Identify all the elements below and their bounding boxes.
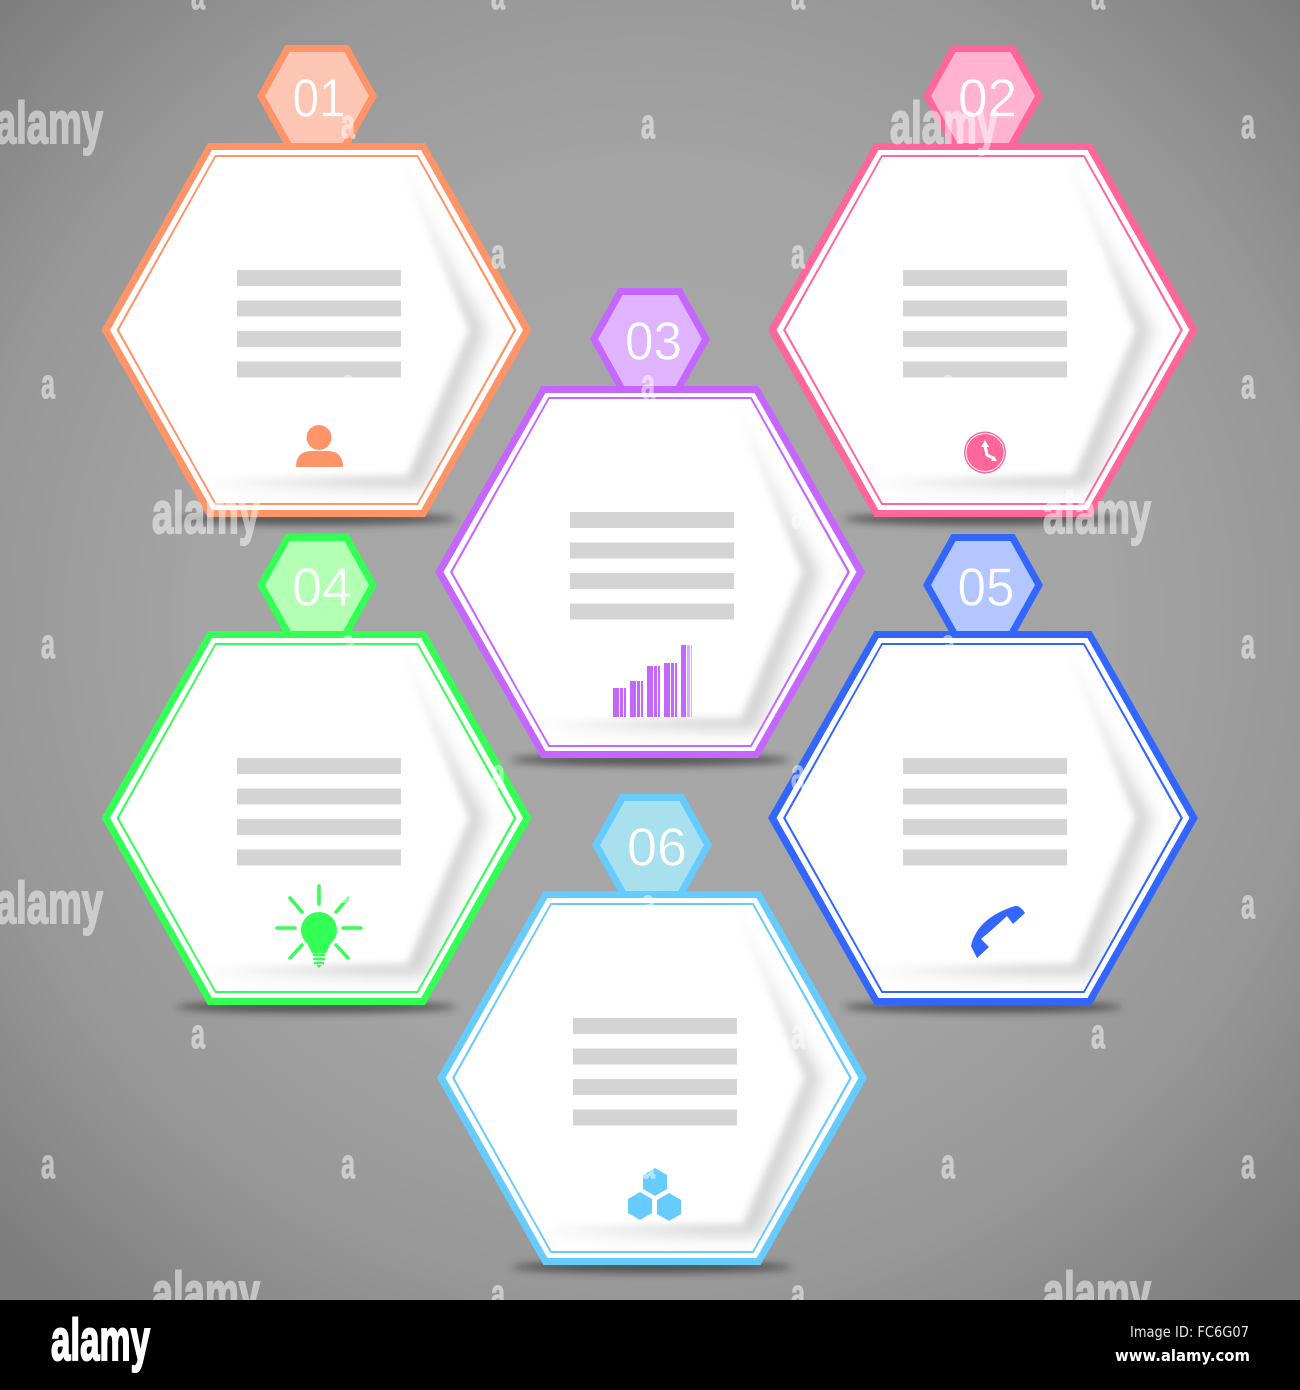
number badge 06 xyxy=(592,794,712,896)
hexagon card 04 xyxy=(16,518,532,1013)
icon: light bulb xyxy=(277,886,361,968)
number badge 02: 02 xyxy=(958,68,1017,128)
watermarks: a xyxy=(341,620,355,667)
icon: clock xyxy=(964,432,1006,474)
watermarks: a xyxy=(341,1140,355,1187)
watermarks: a xyxy=(1241,620,1255,667)
hexagon card 01 xyxy=(16,30,532,525)
watermarks: a xyxy=(41,620,55,667)
panel 05: blue hexagon xyxy=(683,518,1198,1013)
icon: person xyxy=(296,425,343,467)
watermarks: a xyxy=(1241,880,1255,927)
watermarks: a xyxy=(1241,100,1255,147)
watermarks: a xyxy=(641,100,655,147)
watermarks: a xyxy=(341,100,355,147)
watermarks: alamy xyxy=(1043,481,1151,546)
watermarks: a xyxy=(1091,230,1105,277)
panel 01: orange hexagon xyxy=(16,30,532,525)
watermarks: alamy xyxy=(152,481,260,546)
watermarks: a xyxy=(941,1140,955,1187)
footer bar xyxy=(0,1300,1300,1390)
watermarks: a xyxy=(191,1010,205,1057)
watermarks: a xyxy=(791,490,805,537)
hexagon card 03 xyxy=(350,272,865,766)
watermarks: a xyxy=(1091,750,1105,797)
number badge 05: 05 xyxy=(958,558,1014,618)
watermarks: a xyxy=(941,620,955,667)
number badge 01: 01 xyxy=(292,68,346,128)
watermarks: a xyxy=(791,750,805,797)
panel 02: pink hexagon xyxy=(683,30,1198,525)
number badge 06: 06 xyxy=(627,818,687,878)
watermarks: a xyxy=(491,490,505,537)
watermarks: alamy xyxy=(152,1261,260,1326)
watermarks: a xyxy=(491,1010,505,1057)
number badge 02 xyxy=(923,45,1043,147)
watermarks: a xyxy=(1091,1010,1105,1057)
watermarks: a xyxy=(641,620,655,667)
number badge 03 xyxy=(590,288,710,390)
footer logo: alamy xyxy=(51,1308,150,1373)
hexagon card 02 xyxy=(683,30,1198,525)
number badge 04 xyxy=(257,534,377,636)
number badge 01 xyxy=(257,45,377,147)
watermarks: alamy xyxy=(890,91,998,156)
number badge 04: 04 xyxy=(292,558,352,618)
number badge 05 xyxy=(923,534,1043,636)
watermarks: a xyxy=(791,1010,805,1057)
panel 03: purple hexagon xyxy=(350,272,865,766)
watermarks: a xyxy=(641,360,655,407)
watermarks: a xyxy=(341,360,355,407)
image id: Image ID: FC6G07 xyxy=(1130,1323,1249,1341)
number badge 03: 03 xyxy=(625,312,682,372)
watermarks: a xyxy=(491,750,505,797)
watermarks: a xyxy=(1241,360,1255,407)
watermarks: a xyxy=(1241,1140,1255,1187)
watermarks: a xyxy=(791,230,805,277)
watermarks: a xyxy=(491,230,505,277)
watermarks: a xyxy=(791,1270,805,1317)
icon: three hexagons xyxy=(628,1168,681,1221)
icon: bar chart xyxy=(613,645,692,717)
hexagon card 06 xyxy=(352,778,867,1273)
watermarks: a xyxy=(341,880,355,927)
watermarks: a xyxy=(941,360,955,407)
watermarks: a xyxy=(491,1270,505,1317)
panel 06: light blue hexagon xyxy=(352,778,867,1273)
watermarks: a xyxy=(41,360,55,407)
icon: telephone xyxy=(971,906,1025,958)
watermarks: a xyxy=(941,880,955,927)
watermarks: a xyxy=(641,880,655,927)
website: www.alamy.com xyxy=(1115,1346,1250,1365)
watermarks: alamy xyxy=(1043,1261,1151,1326)
hexagon card 05 xyxy=(683,518,1198,1013)
panel 04: green hexagon xyxy=(16,518,532,1013)
watermarks: a xyxy=(41,1140,55,1187)
watermarks: a xyxy=(641,1140,655,1187)
watermarks: a xyxy=(191,750,205,797)
watermarks: a xyxy=(191,230,205,277)
